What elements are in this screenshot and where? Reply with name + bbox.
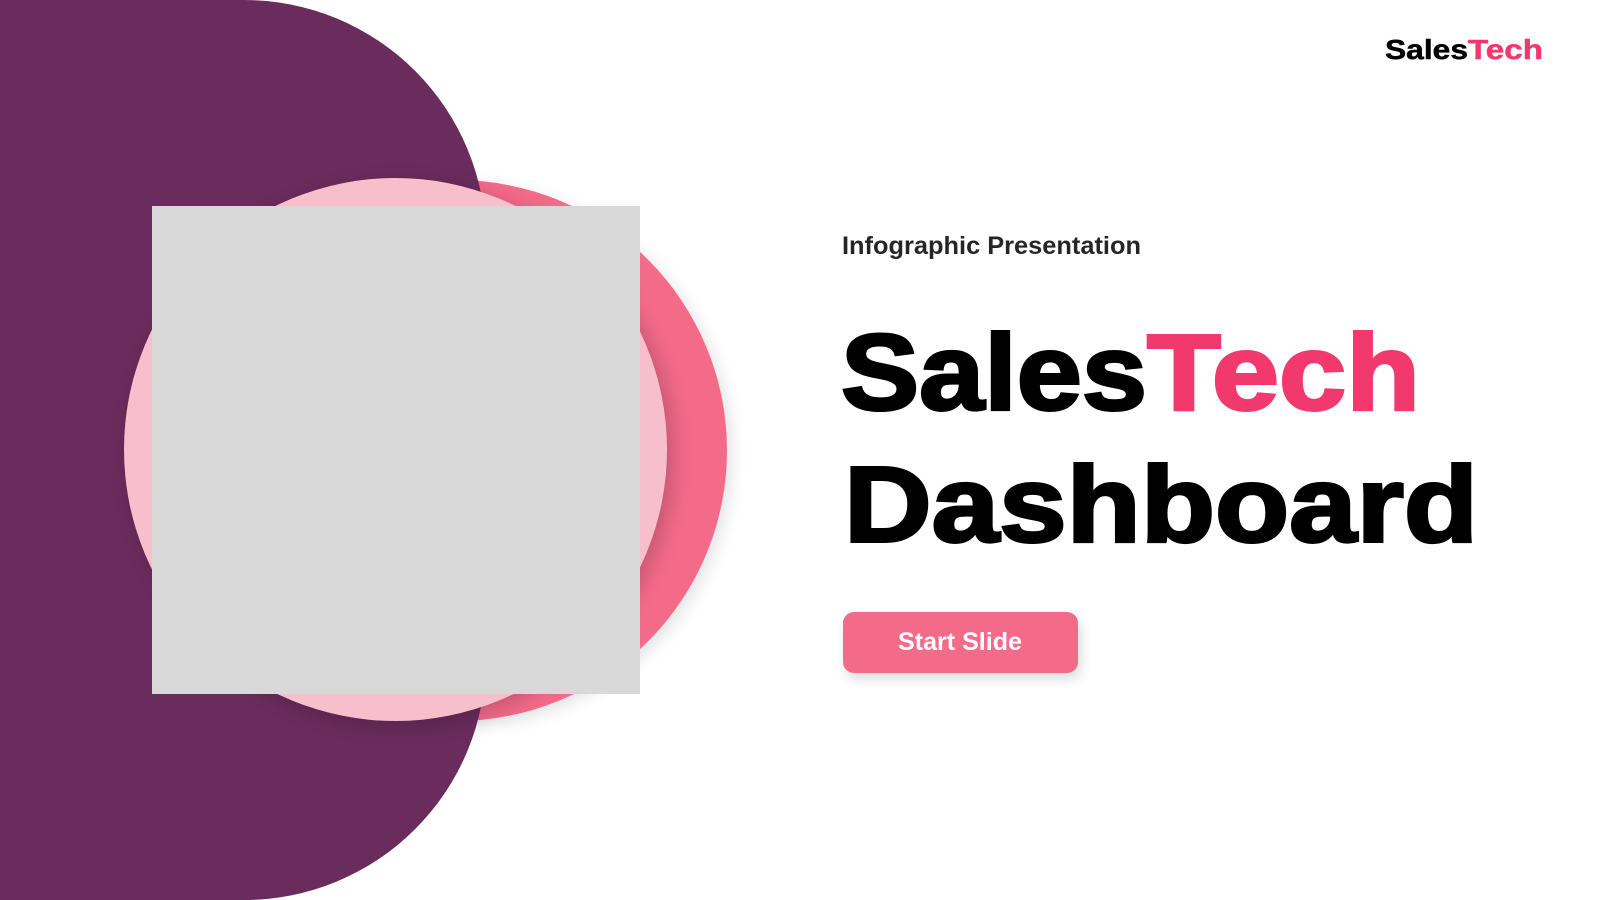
- subtitle: Infographic Presentation: Infographic Presentation: [842, 232, 1141, 260]
- button label: Start Slide: Start Slide: [898, 628, 1022, 656]
- panel: purple rounded background shape: [0, 0, 486, 900]
- title line one: SalesTech: [841, 312, 1420, 432]
- title line one: SalesTech: Tech: [1147, 312, 1420, 432]
- image placeholder: grey square: [152, 206, 640, 694]
- circle: rear coral pink circle: [184, 180, 726, 720]
- title line two: Dashboard: Dashboard: [844, 444, 1478, 564]
- logo: SalesTech: Tech: [1468, 34, 1543, 65]
- logo: SalesTech: [1385, 34, 1543, 65]
- logo: SalesTech: Sales: [1385, 34, 1468, 65]
- button: start slide background: [842, 612, 1078, 673]
- circle: front light pink circle: [124, 178, 667, 721]
- title line one: SalesTech: Sales: [841, 312, 1147, 432]
